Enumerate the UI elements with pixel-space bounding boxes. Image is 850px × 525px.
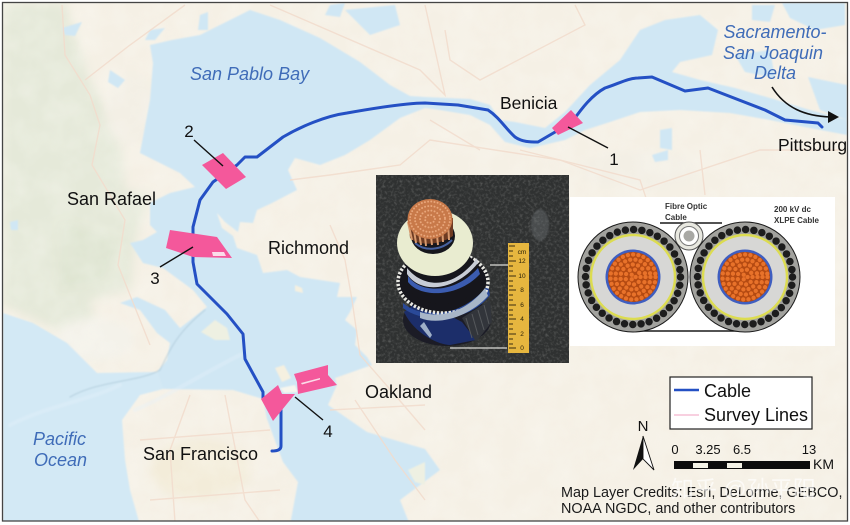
- black semiconducting layer: [412, 228, 455, 254]
- legend: Cable: [704, 381, 751, 401]
- ruler: [508, 243, 529, 353]
- left power cable: [578, 222, 688, 332]
- ruler: 4: [520, 316, 524, 323]
- scale bar: 3.25: [695, 442, 721, 457]
- inner black layer and blue tape: [406, 257, 474, 268]
- bundle outline: [640, 223, 740, 331]
- water labels: Pacific: [33, 429, 86, 449]
- scale bar: 13: [802, 442, 816, 457]
- diagram labels: Cable: [665, 213, 687, 222]
- north arrow: N: [638, 418, 648, 435]
- water labels: Delta: [754, 63, 796, 83]
- silver bead ring: [397, 251, 489, 313]
- cable route: [193, 77, 822, 451]
- diagram labels: XLPE Cable: [774, 216, 819, 225]
- watermark: 知乎 @孙平阳: [671, 476, 816, 502]
- place labels: [67, 93, 847, 464]
- water labels: [33, 22, 827, 470]
- legend: [670, 377, 812, 429]
- legend: Survey Lines: [704, 405, 808, 425]
- ruler: 12: [518, 258, 526, 265]
- right power cable: [690, 222, 800, 332]
- fibre optic cable: [675, 222, 703, 250]
- ocean current streaks: [70, 310, 205, 398]
- water labels: Sacramento-: [723, 22, 827, 42]
- swath highlights: [212, 252, 320, 384]
- place labels: Oakland: [365, 382, 432, 402]
- ruler: 8: [520, 287, 524, 294]
- ruler: cm: [518, 249, 526, 256]
- white insulation: [397, 210, 473, 276]
- survey swaths: [166, 110, 583, 421]
- water labels: Ocean: [34, 450, 87, 470]
- lower armour: [397, 199, 492, 346]
- map credit: Map Layer Credits: Esri, DeLorme, GEBCO,: [561, 485, 843, 501]
- ruler: 10: [518, 273, 526, 280]
- place labels: Richmond: [268, 238, 349, 258]
- swath 3: [166, 230, 232, 258]
- place labels: San Francisco: [143, 444, 258, 464]
- leader lines: [160, 127, 608, 420]
- swath 1: [552, 110, 583, 135]
- scale bar: 0: [671, 442, 679, 457]
- diagram labels: 200 kV dc: [774, 205, 811, 214]
- scale bar: KM: [813, 456, 834, 472]
- delta arrow: [772, 87, 839, 123]
- swath numbers: [150, 122, 619, 441]
- swath numbers: 3: [150, 269, 160, 288]
- ruler: 2: [520, 331, 524, 338]
- swath 4 east: [294, 365, 337, 394]
- place labels: Benicia: [500, 93, 558, 113]
- swath numbers: 1: [609, 150, 619, 169]
- swath numbers: 4: [323, 422, 333, 441]
- water labels: San Pablo Bay: [190, 64, 310, 84]
- diagram labels: [665, 202, 819, 225]
- swath 2: [202, 153, 246, 189]
- ruler indicator lines: [450, 265, 508, 348]
- diagram labels: Fibre Optic: [665, 202, 708, 211]
- copper conductor: [408, 218, 453, 244]
- north arrow: [633, 418, 654, 470]
- place labels: San Rafael: [67, 189, 156, 209]
- swath numbers: 2: [184, 122, 194, 141]
- map credit: [561, 485, 843, 517]
- ruler: 0: [520, 345, 524, 352]
- islands: [201, 285, 425, 485]
- scale bar: [671, 442, 834, 472]
- map credit: NOAA NGDC, and other contributors: [561, 501, 795, 517]
- panel: cable photograph: [376, 175, 569, 363]
- panel: cable cross-section diagram: [570, 197, 835, 346]
- ruler: 6: [520, 302, 524, 309]
- water labels: San Joaquin: [723, 43, 823, 63]
- place labels: Pittsburg: [778, 135, 847, 155]
- swath 4 west: [261, 385, 295, 421]
- scale bar: 6.5: [733, 442, 751, 457]
